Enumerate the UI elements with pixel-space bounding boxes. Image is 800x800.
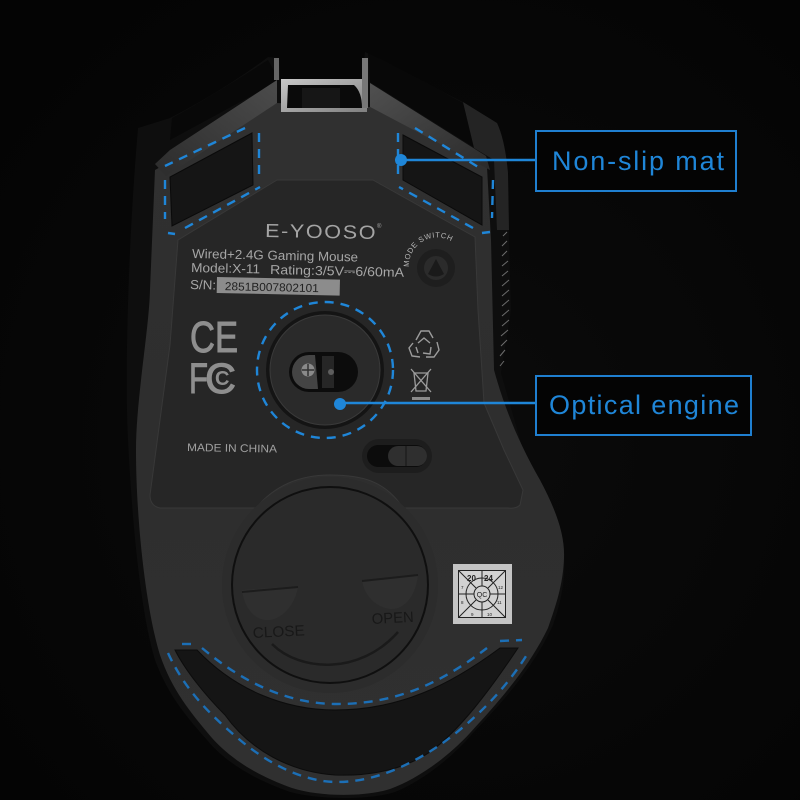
QC sticker: 24 xyxy=(484,574,493,583)
right button xyxy=(368,53,475,148)
product specification text xyxy=(190,246,405,293)
logo: E-YOOSO: ® xyxy=(377,223,382,230)
rotation arrow xyxy=(272,632,398,665)
label plate xyxy=(150,180,523,508)
icon: crossed-out bin xyxy=(411,369,431,400)
serial number label xyxy=(217,277,340,296)
product specification text: Wired+2.4G Gaming Mouse xyxy=(192,246,358,264)
right grip groove xyxy=(362,575,418,609)
bottom non-slip pad xyxy=(175,648,518,775)
left grey strip xyxy=(155,80,277,176)
dashed outline: bottom pad xyxy=(168,640,528,782)
mode switch button: MODE SWITCH xyxy=(404,232,453,266)
QC sticker: 10 xyxy=(487,612,493,617)
logo: E-YOOSO: E-YOOSO xyxy=(265,221,377,244)
right non-slip pad xyxy=(403,135,482,225)
scroll wheel opening xyxy=(274,58,368,112)
FCC mark: C xyxy=(205,355,236,403)
left grip groove xyxy=(242,586,298,620)
FCC mark: C xyxy=(215,368,229,390)
product specification text: Model:X-11 xyxy=(191,260,260,276)
right grey strip xyxy=(370,83,490,170)
body outer shell xyxy=(127,52,564,798)
QC sticker: 20 xyxy=(467,574,476,583)
mouse body xyxy=(127,52,564,798)
callout: non-slip mat xyxy=(395,131,736,191)
QC sticker: 8 xyxy=(461,600,464,605)
product specification text: S/N: xyxy=(190,277,216,293)
callout: optical engine xyxy=(334,376,751,435)
FCC mark: F xyxy=(189,355,208,403)
dashed outline: top pads xyxy=(165,128,493,234)
battery cover xyxy=(222,477,438,693)
dashed circle: optical engine xyxy=(257,302,393,438)
left non-slip pad xyxy=(170,133,253,226)
FCC mark xyxy=(189,355,236,403)
FCC mark: C xyxy=(211,363,231,394)
side grip xyxy=(500,232,509,366)
serial number label: 2851B007802101 xyxy=(225,281,319,295)
CE mark: CE xyxy=(190,313,238,362)
sensor housing xyxy=(266,311,384,429)
icon: recycling xyxy=(409,331,439,357)
callout: non-slip mat: Non-slip mat xyxy=(552,146,724,176)
QC sticker: 12 xyxy=(498,585,504,590)
QC sticker: 9 xyxy=(471,612,474,617)
open label: OPEN xyxy=(371,609,414,628)
close label: CLOSE xyxy=(252,622,305,642)
product specification text: Rating:3/5V⎓6/60mA xyxy=(270,262,405,280)
QC sticker: 7 xyxy=(461,585,464,590)
left button xyxy=(170,60,277,140)
QC sticker: QC xyxy=(477,592,487,599)
QC sticker: 11 xyxy=(497,600,502,605)
body lighter underside xyxy=(136,103,564,795)
callout: optical engine: Optical engine xyxy=(549,390,739,420)
QC sticker xyxy=(453,564,512,624)
right shell edge xyxy=(463,102,509,230)
slide switch xyxy=(362,439,432,473)
made in china text: MADE IN CHINA xyxy=(187,442,278,456)
mode switch button xyxy=(404,232,453,283)
